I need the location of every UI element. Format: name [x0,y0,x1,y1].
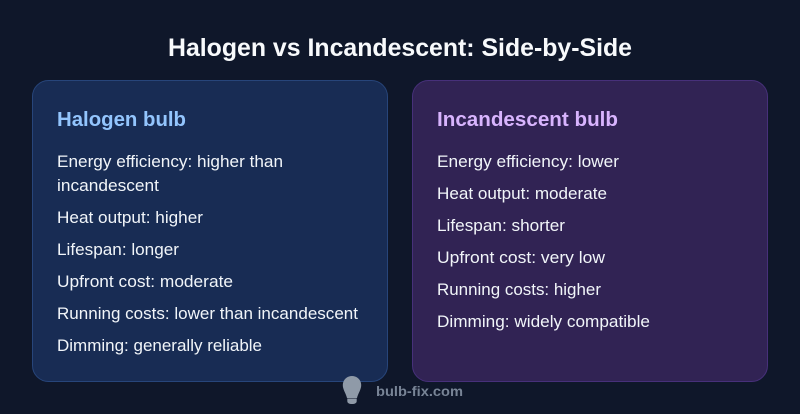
list: halogen attributes [57,153,358,355]
list: incandescent attributes: Upfront cost: very low [437,249,605,267]
list: incandescent attributes: Dimming: widely compatible [437,313,650,331]
list: halogen attributes: Running costs: lower than incandescent [57,305,358,323]
list: halogen attributes: incandescent [57,177,159,195]
heading: halogen bulb: Halogen bulb [57,108,186,131]
icon: light bulb [343,376,361,404]
footer brand [343,376,463,404]
panel: incandescent bulb [412,80,768,382]
list: halogen attributes: Upfront cost: moderate [57,273,233,291]
list: incandescent attributes: Heat output: moderate [437,185,607,203]
list: halogen attributes: Heat output: higher [57,209,204,227]
list: incandescent attributes [437,153,650,331]
title: Halogen vs Incandescent: Side-by-Side [168,34,632,62]
list: incandescent attributes: Energy efficiency: lower [437,153,620,171]
panel background: halogen [32,80,388,382]
panel background: incandescent [412,80,768,382]
brand name: bulb-fix.com [376,384,463,399]
list: incandescent attributes: Running costs: higher [437,281,602,299]
heading: incandescent bulb: Incandescent bulb [437,108,618,131]
list: halogen attributes: Lifespan: longer [57,241,180,259]
list: halogen attributes: Dimming: generally reliable [57,337,262,355]
panel: halogen bulb [32,80,388,382]
list: halogen attributes: Energy efficiency: higher than [57,153,283,171]
list: incandescent attributes: Lifespan: shorter [437,217,566,235]
